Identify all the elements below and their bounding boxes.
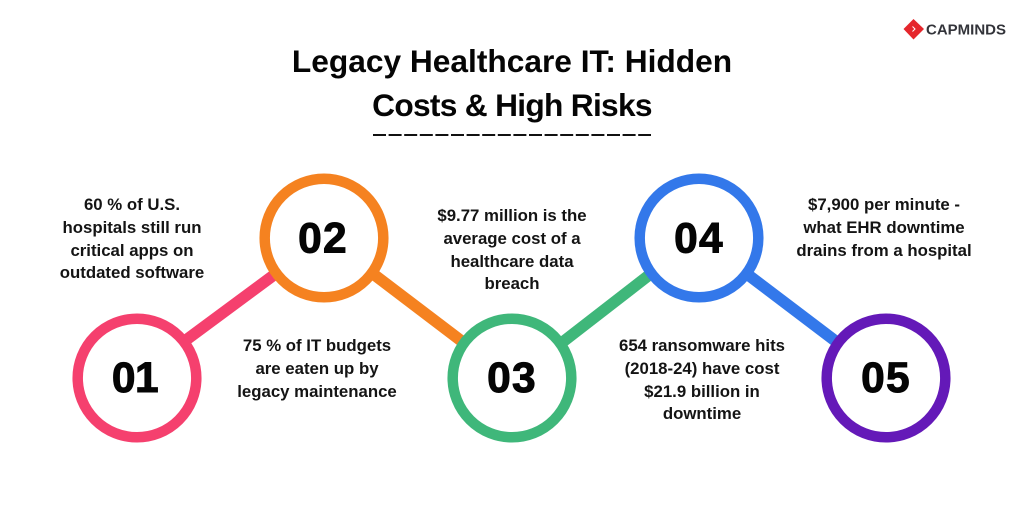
- text: stat 02: [237, 336, 397, 401]
- text: stat 03: average cost of a: [443, 229, 581, 248]
- text: stat 04: 654 ransomware hits: [619, 336, 785, 355]
- text: stat 01: outdated software: [60, 263, 204, 282]
- circle 03: 03: [487, 355, 537, 402]
- text: stat 05: drains from a hospital: [796, 241, 972, 260]
- circle 02: 02: [298, 216, 348, 262]
- text: stat 05: $7,900 per minute -: [808, 195, 960, 214]
- connector: 04 to 05: [745, 272, 840, 344]
- connector: 01 to 02: [180, 270, 280, 344]
- text: stat 01: critical apps on: [70, 241, 194, 260]
- circle 02: [265, 179, 383, 297]
- text: stat 03: [437, 206, 587, 293]
- title: [292, 43, 732, 123]
- text: stat 03: breach: [484, 274, 540, 293]
- circle 04: [640, 179, 758, 297]
- text: stat 02: 75 % of IT budgets: [243, 336, 391, 355]
- circle 05: [827, 319, 945, 437]
- text: stat 04: $21.9 billion in: [644, 382, 760, 401]
- text: stat 03: $9.77 million is the: [437, 206, 587, 225]
- circle 01: 01: [112, 355, 158, 402]
- title: Legacy Healthcare IT: Hidden: [292, 43, 732, 79]
- text: stat 02: are eaten up by: [255, 359, 379, 378]
- text: stat 05: [796, 195, 972, 260]
- text: stat 01: hospitals still run: [63, 218, 201, 237]
- text: stat 01: 60 % of U.S.: [84, 195, 180, 214]
- title: Costs & High Risks: [372, 87, 652, 123]
- logo wordmark: CAPMINDS: [926, 22, 1006, 38]
- circle 05: 05: [861, 355, 911, 402]
- text: stat 05: what EHR downtime: [803, 218, 965, 237]
- text: stat 04: (2018-24) have cost: [625, 359, 779, 378]
- text: stat 02: legacy maintenance: [237, 382, 397, 401]
- text: stat 04: downtime: [663, 404, 741, 423]
- circle 04: 04: [674, 216, 724, 262]
- text: stat 03: healthcare data: [450, 252, 574, 271]
- connector: 02 to 03: [368, 270, 470, 348]
- circle 03: [453, 319, 571, 437]
- text: stat 04: [619, 336, 785, 423]
- circle 01: [78, 319, 196, 437]
- icon: red diamond: [904, 19, 924, 40]
- text: stat 01: [60, 195, 204, 282]
- connector: 03 to 04: [555, 270, 655, 348]
